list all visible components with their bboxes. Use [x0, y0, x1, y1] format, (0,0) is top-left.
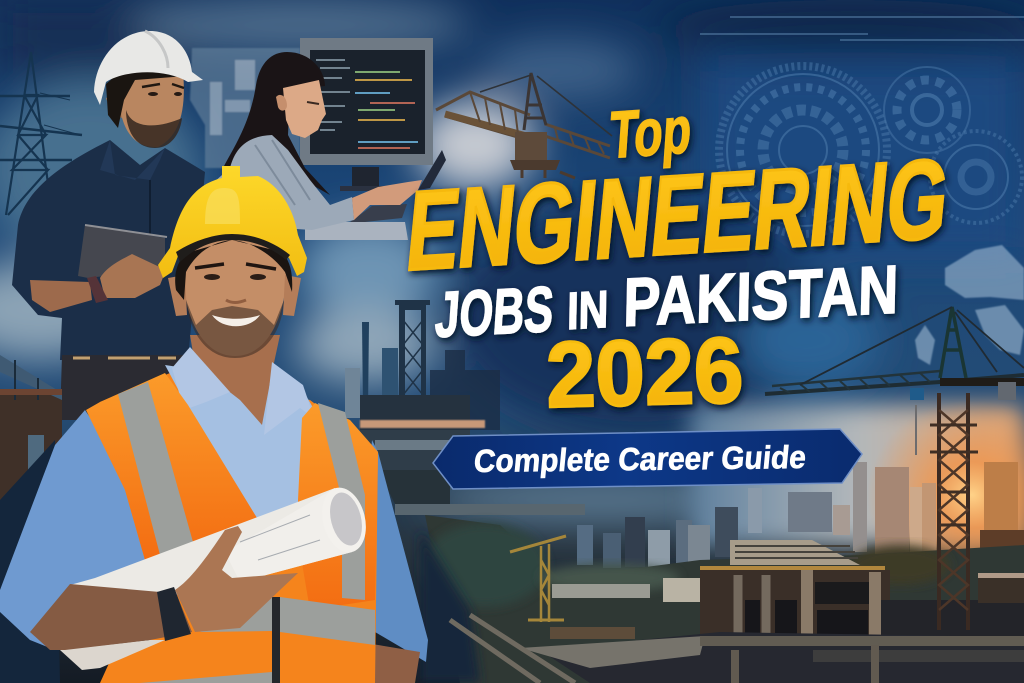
building under construction — [450, 540, 1024, 683]
yellow hard hat — [158, 166, 307, 278]
right eye — [250, 274, 266, 280]
forearm hand and watch — [30, 526, 298, 650]
hat band — [176, 234, 290, 262]
city skyline bottom right — [577, 462, 1024, 575]
icon: gears top right — [700, 17, 1024, 234]
small crane — [510, 536, 566, 622]
trees and ground — [420, 515, 1024, 683]
heading — [402, 93, 954, 427]
shirt chest — [165, 365, 320, 518]
blueprint roll — [60, 483, 372, 670]
woman at computer — [205, 52, 422, 230]
neck — [190, 335, 280, 425]
pylon center and plant — [345, 300, 585, 515]
crane right — [765, 307, 1024, 630]
main engineer — [0, 166, 428, 683]
smile — [212, 315, 260, 326]
banner text: Complete Career Guide — [472, 439, 808, 479]
word: in: IN — [567, 281, 609, 341]
crane top center — [436, 73, 612, 178]
beard stubble — [186, 300, 284, 358]
right vest panel — [298, 403, 378, 610]
right shirt sleeve — [365, 440, 428, 662]
left shirt sleeve — [0, 410, 150, 650]
left vest panel — [86, 373, 257, 560]
pylon left — [0, 52, 82, 215]
word: Jobs: JOBS — [433, 273, 556, 351]
face — [183, 238, 286, 356]
hat highlight — [205, 188, 240, 224]
title year: 2026: 2026 — [545, 318, 744, 427]
collar right — [264, 362, 314, 435]
collar left — [172, 347, 230, 410]
torso base — [100, 373, 378, 683]
man with white hard hat and tablet — [12, 31, 205, 420]
head — [118, 72, 184, 147]
right forearm — [372, 644, 420, 683]
word: Pakistan: PAKISTAN — [623, 252, 899, 341]
bridge left — [0, 355, 62, 683]
ears — [168, 275, 301, 316]
title line: Jobs in Pakistan — [433, 252, 899, 351]
banner: complete career guide — [433, 429, 862, 489]
reflective vest stripes — [118, 382, 375, 683]
computer monitor — [300, 38, 446, 240]
vest zipper — [272, 597, 280, 683]
nose — [226, 300, 246, 302]
title word: Top: Top — [607, 93, 694, 173]
world map hint — [915, 245, 1024, 365]
building behind monitor — [190, 48, 300, 168]
hair — [175, 240, 292, 300]
brows — [195, 264, 276, 269]
left eye — [204, 274, 220, 280]
